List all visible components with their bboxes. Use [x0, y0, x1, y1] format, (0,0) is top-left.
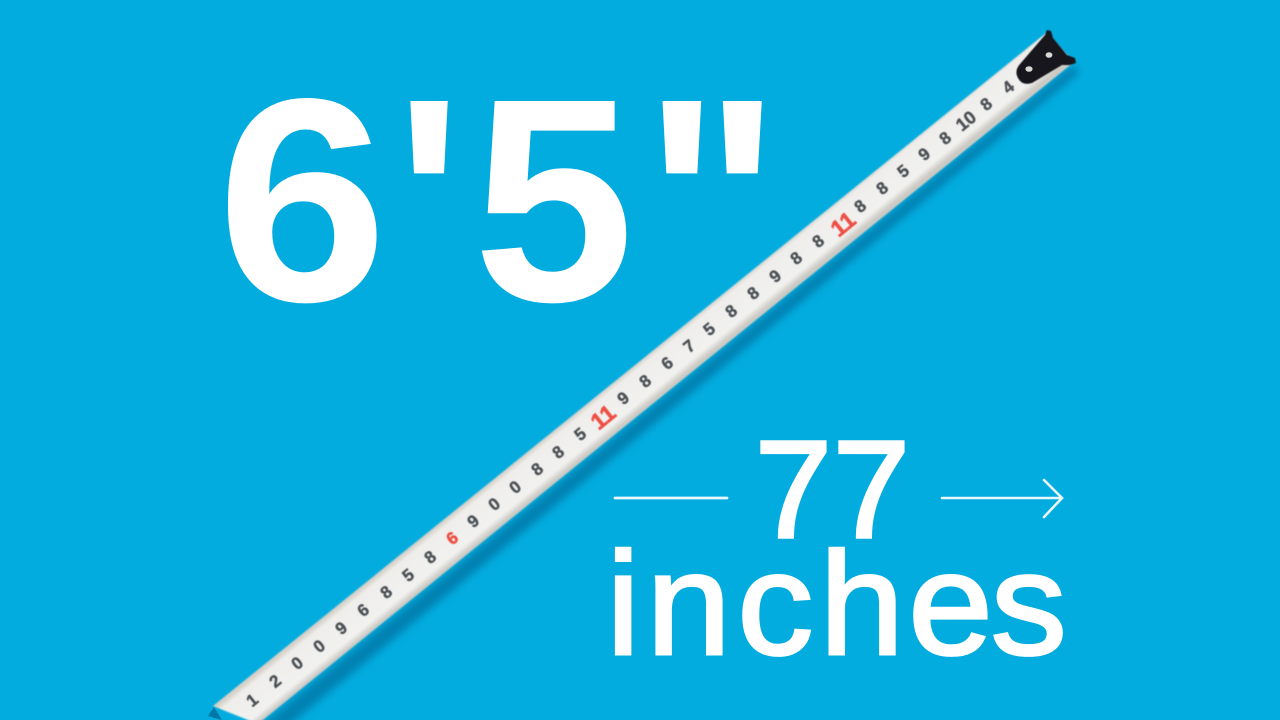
tape numerals: 2 [266, 671, 285, 692]
tape body [213, 33, 1074, 720]
tape numerals: 9 [915, 144, 934, 165]
tape numerals: 7 [680, 336, 699, 357]
tape numerals: 0 [506, 477, 525, 498]
tape numerals: 0 [310, 636, 329, 657]
tape numerals: 5 [894, 161, 913, 182]
tape numerals: 8 [977, 94, 996, 115]
tape numerals: 5 [571, 424, 590, 445]
tape numerals: 8 [851, 196, 870, 217]
tape numerals: 8 [787, 248, 806, 269]
inches label: inches [606, 522, 1067, 685]
tape numerals: 9 [332, 618, 351, 639]
tape numerals: 9 [614, 388, 633, 409]
tape numerals: 6 [354, 600, 373, 621]
tape numerals [243, 77, 1018, 711]
tape numerals: 5 [399, 565, 418, 586]
tape numerals: 8 [809, 231, 828, 252]
tape numerals: 8 [936, 128, 955, 149]
tape shadow [258, 66, 1080, 720]
big height heading: ' [395, 38, 462, 362]
tape numerals: 5 [700, 319, 719, 340]
tape numerals: 4 [999, 77, 1018, 98]
tape numerals: 11 [585, 399, 621, 435]
tape numerals: 8 [549, 442, 568, 463]
tape end shadow [208, 707, 222, 720]
tape numerals: 6 [443, 528, 462, 549]
big height heading [217, 38, 781, 363]
tape numerals: 8 [722, 301, 741, 322]
tape numerals: 9 [766, 266, 785, 287]
tape numerals: 8 [528, 459, 547, 480]
big height heading: 5 [473, 38, 634, 362]
tape numerals: 8 [377, 582, 396, 603]
measuring tape [208, 30, 1076, 720]
tape numerals: 8 [421, 547, 440, 568]
tape numerals: 6 [658, 353, 677, 374]
tape numerals: 8 [636, 371, 655, 392]
big height heading: 6 [217, 38, 388, 363]
77 number: 77 [755, 413, 910, 567]
tape numerals: 0 [485, 494, 504, 515]
tape numerals: 9 [464, 511, 483, 532]
tape numerals: 0 [288, 653, 307, 674]
tape numerals: 8 [873, 178, 892, 199]
tape numerals: 11 [825, 206, 861, 242]
tape numerals: 10 [952, 107, 980, 135]
metal end hook [1016, 30, 1076, 84]
big height heading: " [643, 38, 781, 362]
right arrow [942, 480, 1062, 517]
tape numerals: 8 [744, 283, 763, 304]
left rule [615, 497, 727, 499]
tape numerals: 1 [243, 690, 262, 711]
